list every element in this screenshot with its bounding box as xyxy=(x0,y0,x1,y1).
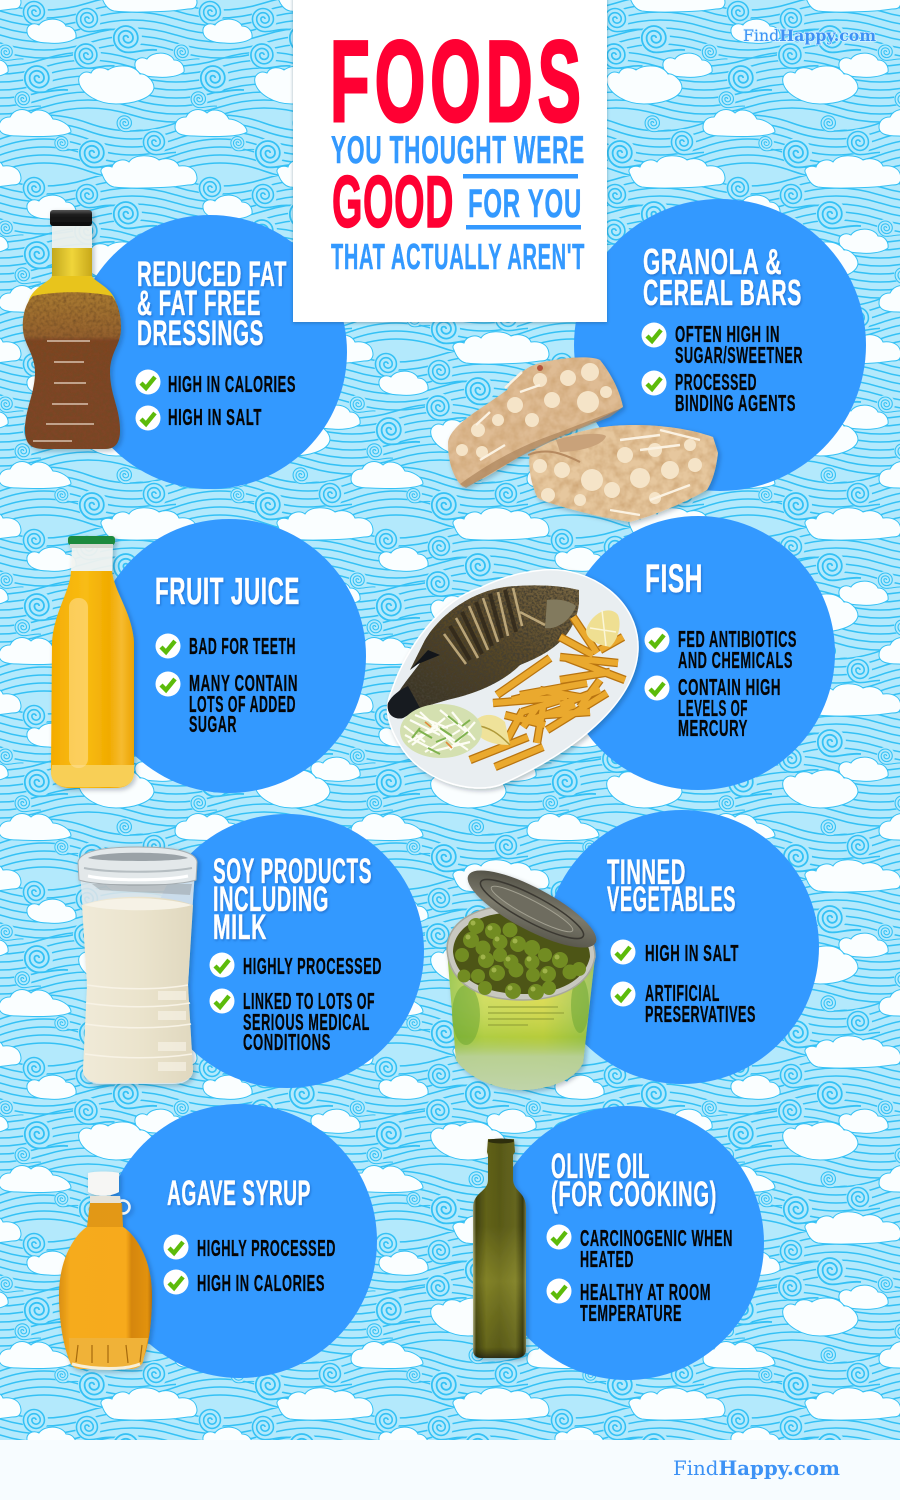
icon: milk jar xyxy=(78,847,197,1084)
bullet: carcinogenic when heated: CARCINOGENIC WHEN xyxy=(580,1225,733,1251)
bullet: high in calories: HIGH IN CALORIES xyxy=(168,371,296,397)
bullet: processed binding agents: BINDING AGENTS xyxy=(675,390,796,416)
panel: fish xyxy=(387,516,835,790)
heading: & FAT FREE xyxy=(137,284,261,323)
bullet: many contain lots of added sugar: MANY CONTAIN xyxy=(189,670,298,696)
title: good: GOOD xyxy=(332,162,454,243)
heading: AGAVE SYRUP xyxy=(167,1174,311,1213)
footer band xyxy=(0,1440,900,1500)
plate xyxy=(387,570,638,788)
blue circle xyxy=(92,519,366,793)
bullet: linked to serious medical conditions: LINKED TO LOTS OF xyxy=(243,988,375,1014)
bullet: bad for teeth: BAD FOR TEETH xyxy=(189,633,296,659)
bullet: fed antibiotics and chemicals xyxy=(644,626,797,673)
can body xyxy=(447,950,595,1090)
subtitle: that actually aren't: THAT ACTUALLY AREN'T xyxy=(331,236,585,277)
bullet: highly processed: HIGHLY PROCESSED xyxy=(197,1235,336,1261)
bullet: contain high levels of mercury: LEVELS OF xyxy=(678,695,748,721)
panel: soy products including milk xyxy=(78,814,424,1088)
bullet: high in calories xyxy=(136,370,296,397)
bullet: many contain lots of added sugar: LOTS OF ADDED xyxy=(189,691,296,717)
bullet: high in calories xyxy=(164,1270,325,1296)
bullet: highly processed xyxy=(210,952,382,979)
icon: dressing bottle xyxy=(23,210,121,449)
blue circle xyxy=(103,1104,377,1378)
bullet: artificial preservatives xyxy=(610,980,756,1027)
icon: open can of peas xyxy=(447,857,605,1090)
bullet: linked to serious medical conditions xyxy=(210,988,375,1055)
bullet: high in salt: HIGH IN SALT xyxy=(645,940,739,966)
bullet: linked to serious medical conditions: SERIOUS MEDICAL xyxy=(243,1009,370,1035)
heading: DRESSINGS xyxy=(137,314,264,353)
lemon wedges xyxy=(472,610,620,745)
blue circle xyxy=(150,814,424,1088)
panel: olive oil for cooking xyxy=(473,1106,764,1380)
bullet: fed antibiotics and chemicals: FED ANTIBIOTICS xyxy=(678,626,797,652)
heading: GRANOLA & xyxy=(643,241,782,282)
bullet: carcinogenic when heated: HEATED xyxy=(580,1246,634,1272)
bullet: artificial preservatives: ARTIFICIAL xyxy=(645,980,720,1006)
bullet: healthy at room temperature xyxy=(546,1278,711,1326)
blue circle xyxy=(574,199,866,491)
heading xyxy=(607,853,736,919)
bullet: healthy at room temperature: HEALTHY AT ROOM xyxy=(580,1279,711,1305)
panel: reduced fat and fat free dressings xyxy=(23,210,347,489)
heading: INCLUDING xyxy=(213,880,329,919)
blue circle xyxy=(490,1106,764,1380)
icon: syrup bottle xyxy=(59,1172,152,1369)
bullet: bad for teeth xyxy=(156,633,296,659)
subtitle: for you with rules: FOR YOU xyxy=(468,182,582,226)
can opening xyxy=(447,905,595,1000)
bullet: high in salt xyxy=(610,940,739,966)
heading: REDUCED FAT xyxy=(137,255,287,294)
panel: tinned vegetables xyxy=(447,810,819,1090)
coleslaw xyxy=(400,704,482,758)
blue circle xyxy=(73,215,347,489)
logo: top right watermark: FindHappy.com xyxy=(743,26,876,45)
icon: olive oil bottle xyxy=(473,1138,526,1358)
heading: VEGETABLES xyxy=(607,880,736,919)
panel: title card xyxy=(293,0,607,322)
bullet: highly processed: HIGHLY PROCESSED xyxy=(243,953,382,979)
heading: OLIVE OIL xyxy=(551,1147,650,1186)
panel: granola and cereal bars xyxy=(448,199,866,522)
fish xyxy=(388,585,579,718)
bullet: highly processed xyxy=(164,1234,336,1261)
white card xyxy=(293,0,607,322)
bullet: many contain lots of added sugar xyxy=(156,670,298,737)
heading xyxy=(213,852,372,947)
bullet: contain high levels of mercury xyxy=(644,674,781,741)
icon: plate of fish and chips xyxy=(387,570,638,788)
bullet: many contain lots of added sugar: SUGAR xyxy=(189,711,237,737)
subtitle: for you with rules xyxy=(463,174,582,230)
bullet: artificial preservatives: PRESERVATIVES xyxy=(645,1001,756,1027)
bullet: high in calories: HIGH IN CALORIES xyxy=(197,1270,325,1296)
bullet: processed binding agents: PROCESSED xyxy=(675,369,757,395)
bullet: contain high levels of mercury: MERCURY xyxy=(678,715,748,741)
blue circle xyxy=(545,810,819,1084)
heading: FISH xyxy=(645,557,703,601)
icon: granola bars xyxy=(448,357,718,522)
blue circle xyxy=(561,516,835,790)
bullet: fed antibiotics and chemicals: AND CHEMICALS xyxy=(678,647,793,673)
title: foods: FOODS xyxy=(330,18,586,146)
heading: MILK xyxy=(213,908,267,947)
bullet: carcinogenic when heated xyxy=(546,1224,733,1272)
lid xyxy=(459,857,605,961)
bullet: often high in sugar or sweetner: OFTEN HIGH IN xyxy=(675,321,780,347)
logo: footer: FindHappy.com xyxy=(673,1456,840,1480)
heading xyxy=(643,241,802,313)
subtitle: you thought were: YOU THOUGHT WERE xyxy=(331,129,585,172)
bullet: high in salt xyxy=(136,404,262,430)
heading: FRUIT JUICE xyxy=(155,571,300,613)
heading: (FOR COOKING) xyxy=(551,1175,717,1214)
fries xyxy=(470,617,625,767)
bullet: high in salt: HIGH IN SALT xyxy=(168,404,262,430)
bullet: often high in sugar or sweetner xyxy=(642,321,803,368)
icon: juice bottle xyxy=(51,536,134,788)
bullet: contain high levels of mercury: CONTAIN HIGH xyxy=(678,674,781,700)
heading: SOY PRODUCTS xyxy=(213,852,372,891)
heading: TINNED xyxy=(607,853,686,892)
panel: fruit juice xyxy=(51,519,366,793)
heading xyxy=(551,1147,717,1214)
bullet: processed binding agents xyxy=(642,369,796,416)
bullet: healthy at room temperature: TEMPERATURE xyxy=(580,1300,682,1326)
bullet: linked to serious medical conditions: CONDITIONS xyxy=(243,1029,331,1055)
peas xyxy=(455,918,586,1000)
panel: agave syrup xyxy=(59,1104,377,1378)
heading xyxy=(137,255,287,353)
